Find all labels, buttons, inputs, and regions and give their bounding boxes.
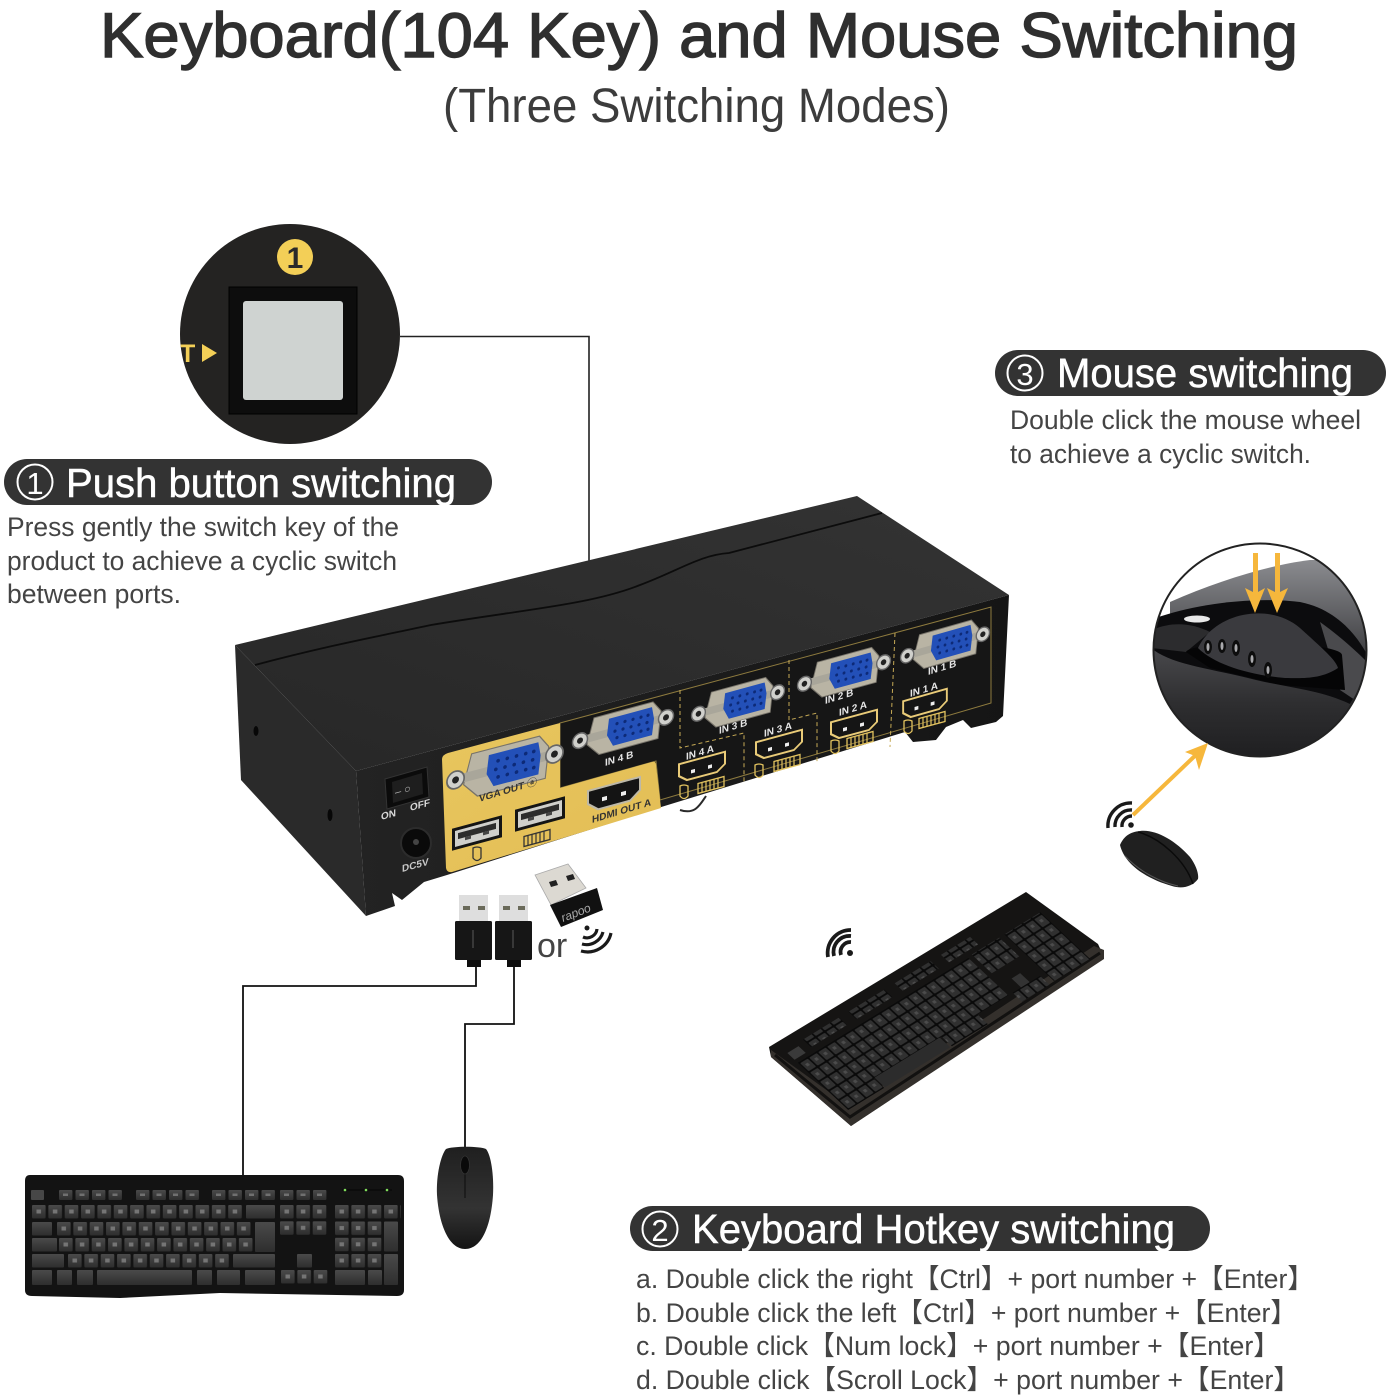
wireless keyboard xyxy=(769,892,1104,1126)
text: hotkey instructions: a. Double click the right【Ctrl】+ port number +【Enter】 xyxy=(636,1264,1314,1294)
text: mouse description: to achieve a cyclic switch. xyxy=(1010,439,1311,469)
navigation keys xyxy=(280,1205,330,1284)
main key block xyxy=(32,1205,275,1285)
USB mouse port xyxy=(452,815,502,851)
power switch xyxy=(385,767,429,809)
wireless dongle xyxy=(535,864,603,927)
VGA input 2 xyxy=(798,642,890,704)
USB plugs xyxy=(455,895,532,967)
arrow: mouse to magnifier xyxy=(1133,743,1208,815)
text: hotkey instructions: b. Double click the left【Ctrl】+ port number +【Enter】 xyxy=(636,1298,1297,1328)
top face xyxy=(235,496,1009,771)
HDMI input 1 xyxy=(903,689,947,719)
port labels: IN 1 A xyxy=(910,681,939,700)
front face xyxy=(356,595,1009,916)
input panel xyxy=(560,607,991,800)
port labels xyxy=(479,659,956,826)
HDMI output port xyxy=(588,777,640,812)
button frame xyxy=(229,287,357,414)
text: push button description: Press gently the switch key of the xyxy=(7,512,399,542)
text: push button description xyxy=(7,512,399,609)
DC5V label: DC5V xyxy=(402,857,429,875)
port labels: IN 3 A xyxy=(764,721,793,740)
icon: keyboard wireless signal xyxy=(828,930,853,957)
pill heading: push button switching: 1 xyxy=(26,466,44,501)
zoomed push button xyxy=(180,224,400,444)
gold output panel xyxy=(442,723,661,872)
function key row xyxy=(31,1190,329,1200)
USB keyboard port xyxy=(515,796,565,832)
wired mouse xyxy=(437,1147,493,1249)
port labels: IN 3 B xyxy=(719,718,747,737)
HDMI input 2 xyxy=(831,710,877,740)
button cap xyxy=(243,301,343,400)
power switch: – ○ xyxy=(395,783,411,799)
number pad xyxy=(335,1205,401,1285)
connector: button to switch xyxy=(400,336,589,570)
lid seam xyxy=(255,513,882,665)
pill heading: keyboard hotkey switching: Keyboard Hotkey switching xyxy=(692,1206,1175,1252)
wireless dongle: rapoo xyxy=(559,901,593,925)
text: or: or xyxy=(537,927,567,965)
side face xyxy=(235,645,366,916)
power jack xyxy=(401,828,431,858)
HDMI input 4 xyxy=(679,752,725,782)
VGA input 1 xyxy=(901,615,989,675)
VGA input 3 xyxy=(692,672,784,734)
HDMI input 3 xyxy=(756,730,802,760)
icon: port number 1 xyxy=(277,239,313,275)
title: Keyboard(104 Key) and Mouse Switching xyxy=(100,1,1298,71)
icon: dongle wireless signal xyxy=(581,926,611,952)
keyboard keys xyxy=(785,901,1092,1110)
text: mouse description xyxy=(1010,405,1361,469)
text: hotkey instructions: d. Double click【Scroll Lock】+ port number +【Enter】 xyxy=(636,1365,1300,1395)
text: push button description: product to achieve a cyclic switch xyxy=(7,546,397,576)
KVM switch box xyxy=(235,496,1009,916)
port labels: IN 1 B xyxy=(928,659,956,678)
pill heading: mouse switching: Mouse switching xyxy=(1057,350,1353,396)
port markers xyxy=(473,711,945,860)
connector: wired mouse cable xyxy=(465,964,514,1147)
label marker xyxy=(180,344,217,362)
connector: wired keyboard cable xyxy=(243,964,476,1175)
stray cable xyxy=(680,796,706,811)
text: mouse description: Double click the mouse wheel xyxy=(1010,405,1361,435)
port labels: VGA OUT ⓐ xyxy=(479,776,537,805)
port labels: IN 4 B xyxy=(605,750,633,769)
port labels: HDMI OUT A xyxy=(592,797,652,826)
mouse wheel magnifier xyxy=(1150,540,1370,760)
icon: mouse wireless signal xyxy=(1108,803,1134,828)
status LEDs xyxy=(342,1189,392,1191)
side screw holes xyxy=(254,726,332,821)
pill heading: mouse switching: 3 xyxy=(1016,357,1034,392)
port labels: IN 2 A xyxy=(839,700,868,719)
text: hotkey instructions xyxy=(636,1264,1314,1395)
pill heading: keyboard hotkey switching: 2 xyxy=(651,1213,669,1248)
icon: press arrows xyxy=(1245,553,1288,613)
subtitle: (Three Switching Modes) xyxy=(443,80,950,133)
on/off labels: OFF xyxy=(410,798,430,814)
text: push button description: between ports. xyxy=(7,579,181,609)
text: hotkey instructions: c. Double click【Num lock】+ port number +【Enter】 xyxy=(636,1331,1280,1361)
icon: port number 1: 1 xyxy=(287,242,303,275)
on/off labels: ON xyxy=(381,808,396,823)
label marker: T xyxy=(180,340,195,368)
pill heading: push button switching: Push button switching xyxy=(66,460,456,506)
keyboard body xyxy=(769,892,1104,1126)
wireless mouse xyxy=(1120,831,1198,887)
port labels: IN 4 A xyxy=(686,744,715,763)
port labels: IN 2 B xyxy=(825,688,853,707)
wired keyboard xyxy=(25,1175,404,1298)
channel dividers xyxy=(680,633,895,783)
VGA output port xyxy=(447,730,563,804)
on/off labels xyxy=(381,798,430,823)
VGA input 4 xyxy=(572,696,674,762)
